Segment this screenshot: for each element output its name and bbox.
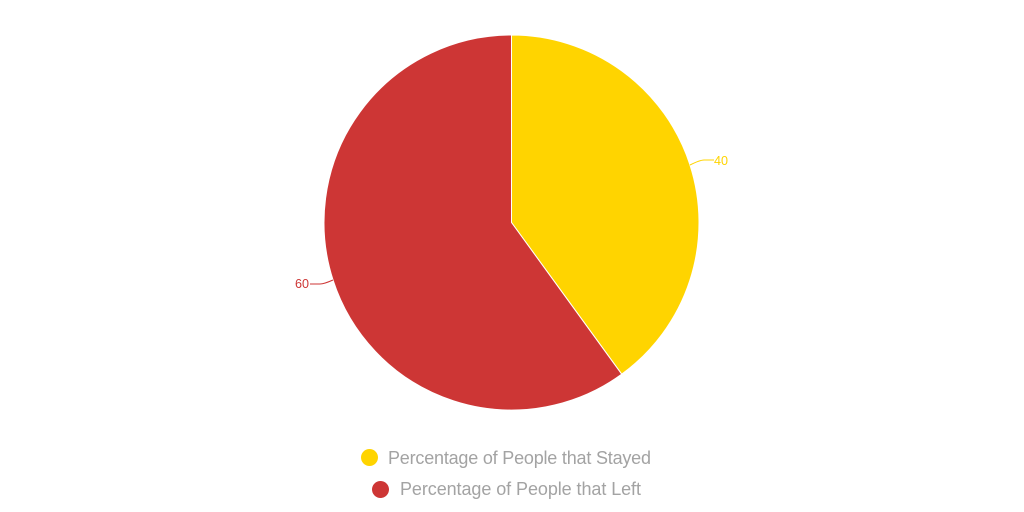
- legend item: left: Percentage of People that Left: [400, 479, 641, 499]
- slice: stayed 40 percent: [512, 35, 699, 374]
- pie chart: [324, 35, 699, 410]
- legend item: stayed: Percentage of People that Stayed: [388, 448, 651, 468]
- data label: 40: 40: [714, 153, 728, 168]
- data label: 60: [295, 276, 333, 291]
- data label: 60: 60: [295, 276, 309, 291]
- legend: [361, 448, 651, 499]
- data label: 40: [690, 153, 728, 168]
- slice: left 60 percent: [324, 35, 622, 410]
